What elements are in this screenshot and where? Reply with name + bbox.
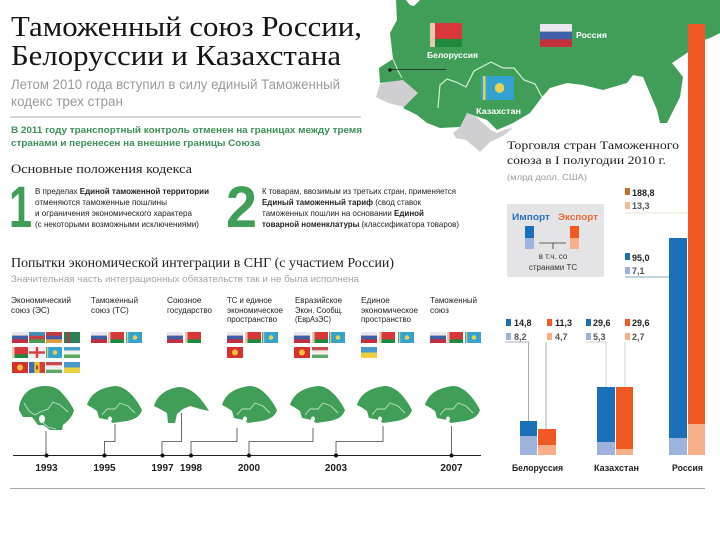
value labels bbox=[625, 188, 655, 276]
export bar bbox=[616, 387, 633, 455]
year labels: 1993 bbox=[35, 463, 58, 474]
provision 2 bbox=[226, 175, 459, 240]
provision 1 bbox=[9, 175, 209, 240]
column 2000: EurAsEC bbox=[294, 295, 345, 358]
value labels: 4,7 bbox=[555, 332, 568, 342]
numeral 1: 1 bbox=[9, 175, 32, 240]
legend: export: Экспорт bbox=[558, 212, 598, 223]
provision 1 text: и ограничения экономического характера bbox=[35, 208, 192, 218]
provision 2 text: К товарам, ввозимым из третьих стран, применяется bbox=[262, 186, 456, 196]
flags bbox=[167, 332, 201, 343]
value labels: 11,3 bbox=[555, 318, 572, 328]
column 1993: Economic Union bbox=[11, 295, 80, 373]
flags bbox=[91, 332, 142, 343]
flag: Belarus bbox=[430, 23, 462, 47]
value labels: 13,3 bbox=[632, 201, 650, 211]
legend: import: Импорт bbox=[512, 212, 550, 223]
label: (ЕврАзЭС) bbox=[295, 314, 331, 324]
subheading: Значительная часть интеграционных обязательств так и не была исполнена bbox=[11, 274, 359, 284]
column 1997: Union State bbox=[167, 295, 212, 343]
bar group: Russia bbox=[625, 24, 705, 474]
column 2007: Customs Union bbox=[430, 295, 481, 343]
label: союз bbox=[430, 305, 449, 315]
label: Единое bbox=[361, 295, 390, 305]
map: Kazakhstan border bbox=[438, 62, 542, 108]
chart unit: (млрд долл. США) bbox=[507, 172, 587, 182]
label: ТС и единое bbox=[227, 295, 272, 305]
import bar bbox=[597, 387, 615, 455]
flags bbox=[227, 332, 278, 358]
value labels: 7,1 bbox=[632, 266, 645, 276]
map: Russia and Kazakhstan landmass bbox=[379, 0, 720, 130]
value labels: 2,7 bbox=[632, 332, 645, 342]
column 1995: Customs Union bbox=[91, 295, 142, 343]
flags bbox=[12, 332, 80, 373]
timeline map icons bbox=[19, 386, 480, 430]
value labels bbox=[586, 318, 650, 342]
label: Экономический bbox=[11, 295, 71, 305]
year labels: 2007 bbox=[440, 463, 463, 474]
label: Таможенный bbox=[91, 295, 138, 305]
flags bbox=[430, 332, 481, 343]
label: пространство bbox=[361, 314, 411, 324]
export bar bbox=[538, 429, 556, 455]
timeline dots bbox=[44, 454, 454, 458]
bar group: Belarus bbox=[505, 318, 572, 474]
label: союз (ТС) bbox=[91, 305, 129, 315]
value labels: 29,6 bbox=[593, 318, 611, 328]
value labels: 188,8 bbox=[632, 188, 655, 198]
label: Russia: Россия bbox=[576, 30, 607, 40]
country label: Белоруссия bbox=[512, 463, 563, 474]
year labels: 1998 bbox=[180, 463, 203, 474]
title: Таможенный союз России, bbox=[11, 11, 362, 43]
value labels: 14,8 bbox=[514, 318, 532, 328]
column 1998: CU and Common Economic Space bbox=[227, 295, 283, 358]
year labels bbox=[35, 463, 463, 474]
provision 1 text: В пределах Единой таможенной территории bbox=[35, 186, 214, 196]
flags bbox=[361, 332, 414, 358]
provision 1 text: (с некоторыми возможными исключениями) bbox=[35, 219, 199, 229]
year labels: 1997 bbox=[151, 463, 174, 474]
green highlight text: странами и перенесен на внешние границы Союза bbox=[11, 138, 261, 148]
green highlight text: В 2011 году транспортный контроль отменен на границах между тремя bbox=[11, 125, 362, 135]
year labels: 2000 bbox=[238, 463, 261, 474]
heading: integration attempts: Попытки экономической интеграции в СНГ (с участием России) bbox=[11, 255, 394, 270]
timeline connectors bbox=[46, 413, 452, 455]
flag: Russia bbox=[540, 24, 572, 47]
value labels: 5,3 bbox=[593, 332, 606, 342]
export bar bbox=[688, 24, 705, 455]
heading: main provisions: Основные положения кодекса bbox=[11, 161, 192, 176]
value labels: 95,0 bbox=[632, 253, 650, 263]
country label: Россия bbox=[672, 463, 703, 474]
map: sea inlet bbox=[406, 0, 420, 6]
label: Таможенный bbox=[430, 295, 477, 305]
value labels bbox=[506, 318, 572, 342]
value labels: 29,6 bbox=[632, 318, 650, 328]
country label: Казахстан bbox=[594, 463, 639, 474]
column 2003: Common Economic Space bbox=[361, 295, 418, 358]
numeral 2: 2 bbox=[226, 175, 257, 240]
map leader line bbox=[388, 68, 446, 72]
label: Kazakhstan: Казахстан bbox=[476, 106, 521, 116]
import bar bbox=[669, 238, 687, 455]
provision 1 text: отменяются таможенные пошлины bbox=[35, 197, 167, 207]
label: Евразийское bbox=[295, 295, 342, 305]
year labels: 2003 bbox=[325, 463, 348, 474]
title: Белоруссии и Казахстана bbox=[11, 40, 341, 72]
legend note: в т.ч. со bbox=[539, 252, 568, 261]
label: государство bbox=[167, 305, 212, 315]
chart title: Торговля стран Таможенного bbox=[507, 138, 679, 152]
provision 2 text: товарной номенклатуры (классификатора товаров) bbox=[262, 219, 464, 229]
year labels: 1995 bbox=[93, 463, 116, 474]
provision 2 text: таможенных пошлин на основании Единой bbox=[262, 208, 425, 218]
bar group: Kazakhstan bbox=[586, 318, 650, 474]
timeline bbox=[13, 413, 481, 474]
value labels: 8,2 bbox=[514, 332, 527, 342]
label: экономическое bbox=[227, 305, 283, 315]
label: Союзное bbox=[167, 295, 202, 305]
provision 2 text: Единый таможенный тариф (свод ставок bbox=[262, 197, 423, 207]
legend note: странами ТС bbox=[529, 263, 577, 272]
label: экономическое bbox=[361, 305, 418, 315]
chart title: союза в I полугодии 2010 г. bbox=[507, 153, 666, 167]
map of the customs union bbox=[376, 0, 720, 152]
label: Экон. Сообщ. bbox=[295, 305, 343, 315]
flags bbox=[294, 332, 345, 358]
subtitle: Летом 2010 года вступил в силу единый Таможенный bbox=[11, 77, 340, 92]
timeline axis bbox=[13, 454, 481, 456]
subtitle: кодекс трех стран bbox=[11, 94, 123, 109]
map: Belarus border bbox=[393, 59, 402, 78]
label: союз (ЭС) bbox=[11, 305, 50, 315]
import bar bbox=[520, 421, 537, 455]
flag: Kazakhstan bbox=[481, 76, 514, 100]
label: Belarus: Белоруссия bbox=[427, 50, 478, 60]
map: neighbouring countries bbox=[376, 80, 513, 152]
legend bbox=[507, 204, 604, 277]
label: пространство bbox=[227, 314, 277, 324]
